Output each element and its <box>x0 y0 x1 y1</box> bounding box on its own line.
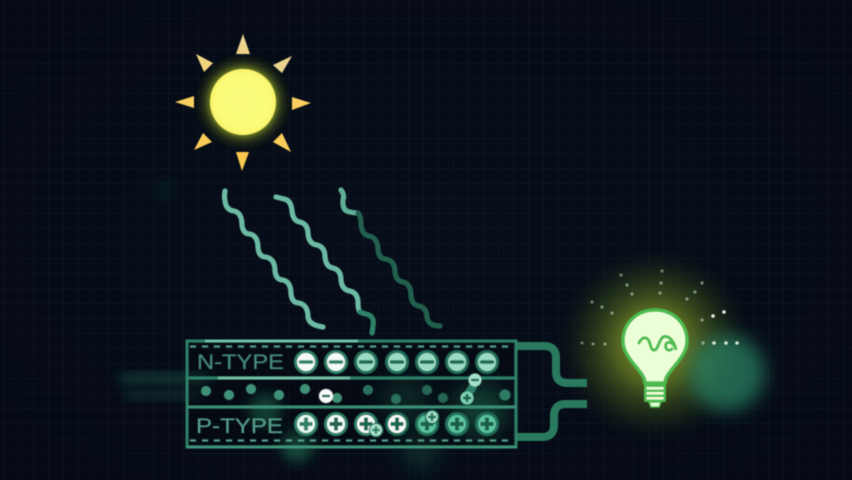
N-TYPE label: N-TYPE <box>197 350 284 374</box>
teal light blob <box>689 335 765 411</box>
junction carriers <box>201 384 510 404</box>
electron crossing junction right <box>468 374 482 386</box>
moving hole on plus 3 <box>370 424 382 436</box>
minus 7 <box>476 352 498 372</box>
bright frame top <box>205 340 358 342</box>
top wire <box>516 346 587 383</box>
solar panel <box>187 340 516 448</box>
radiating light dots <box>580 269 739 346</box>
sun disc <box>210 69 276 135</box>
moving hole on plus 5 <box>426 410 438 424</box>
plus 4 <box>386 414 408 434</box>
glow around bulb <box>555 245 755 445</box>
P-TYPE label: P-TYPE <box>196 414 283 438</box>
sun rays <box>175 34 311 171</box>
wave 2 <box>276 197 373 333</box>
plus 3 <box>356 414 376 434</box>
bright frame bottom <box>187 446 516 448</box>
dashed lines <box>190 346 514 440</box>
plus 6 <box>446 414 468 434</box>
bottom wire <box>516 404 587 437</box>
bulb glass <box>623 310 687 383</box>
minus 1 <box>296 352 316 372</box>
electron crossing junction left <box>319 389 333 403</box>
bulb filament <box>639 337 676 350</box>
plus 2 <box>326 414 346 434</box>
junction divider highlight <box>218 376 350 380</box>
light bulb <box>623 310 687 407</box>
panel background glows <box>120 180 506 468</box>
wave 3 <box>341 190 440 326</box>
minus 6 <box>446 352 468 372</box>
minus 5 <box>416 352 438 372</box>
plus 1 <box>296 414 316 434</box>
plus 7 <box>476 414 498 434</box>
wave 1 <box>224 191 323 327</box>
minus 4 <box>386 352 408 372</box>
electron hole trail <box>468 385 474 394</box>
wires to bulb <box>516 346 587 437</box>
minus 2 <box>326 352 346 372</box>
hole crossing junction right <box>460 392 474 404</box>
minus 3 <box>356 352 376 372</box>
bulb screw base <box>644 384 666 407</box>
negative charges row <box>296 352 498 372</box>
sun <box>175 34 311 171</box>
plus 5 <box>416 414 438 434</box>
panel frame <box>187 341 516 447</box>
light waves <box>224 190 440 333</box>
junction divider top <box>187 376 516 380</box>
positive charges row <box>296 414 498 434</box>
junction divider bottom <box>187 406 516 408</box>
sun glow <box>193 52 293 152</box>
